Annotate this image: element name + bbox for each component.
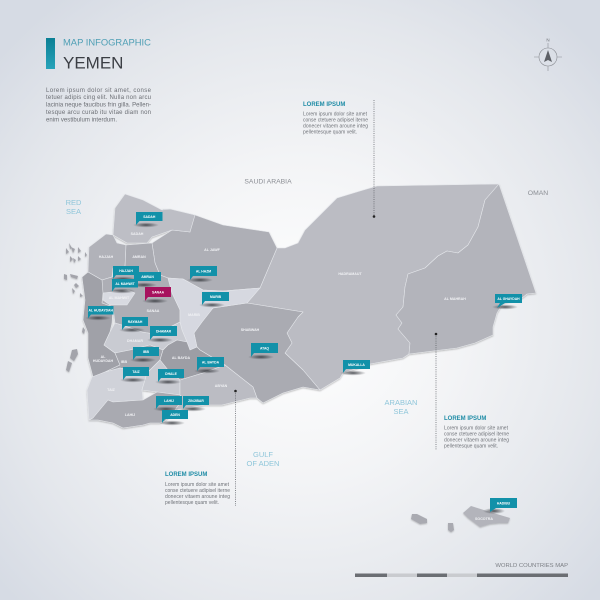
- region labels: SADAH: [131, 232, 144, 236]
- intro paragraph: enim vestibulum interdum.: [46, 118, 117, 124]
- tag: Mukalla: [340, 360, 370, 376]
- tag: Sadah: [133, 212, 162, 228]
- callout: top: conse ctetuere adipisel iterne: [303, 118, 368, 124]
- tag: Al Bayda: [194, 357, 224, 374]
- region labels: AL: [101, 355, 106, 359]
- callout: top: donecer vitaem aroune integ: [303, 124, 368, 130]
- callout: bottom: pellentesque quam velit.: [165, 500, 219, 506]
- tag: Hajjah: HAJJAH: [119, 269, 133, 273]
- tag: Aden: [159, 410, 188, 426]
- intro paragraph: tetuer adipis cing elit. Nulla non arcu: [46, 95, 151, 101]
- tag: Amran: [131, 272, 161, 288]
- callout: right: pellentesque quam velit.: [444, 444, 498, 450]
- callout: bottom: Lorem ipsum dolor site amet: [165, 482, 230, 488]
- region: Raymah and Dhamar: [104, 322, 187, 353]
- tag: Zinjibar: ZINJIBAR: [188, 399, 204, 403]
- region: Al Jawf: [152, 209, 277, 291]
- tag: Marib: MARIB: [210, 295, 222, 299]
- region labels: ABYAN: [215, 384, 228, 388]
- callout: bottom: [165, 472, 230, 506]
- region: Al Mahwit: [103, 290, 135, 305]
- tag: Dhale: DHALE: [165, 372, 178, 376]
- region labels: SHABWAH: [241, 328, 260, 332]
- region labels: IBB: [121, 360, 127, 364]
- tag: Al Mahwit: AL MAHWIT: [115, 282, 136, 286]
- region labels: TAIZ: [107, 388, 116, 392]
- region: Al Hudaydah: [82, 272, 120, 377]
- region labels: HUDAYDAH: [93, 359, 114, 363]
- tag: Hadibu: [483, 498, 517, 514]
- region labels: SANAA: [147, 309, 160, 313]
- tag: Taiz: TAIZ: [132, 370, 140, 374]
- neighbouring country and sea labels: OF ADEN: [247, 459, 279, 468]
- neighbouring country and sea labels: SAUDI ARABIA: [244, 178, 292, 186]
- callout: right: Lorem ipsum dolor site amet: [444, 426, 509, 432]
- tag: Dhamar: DHAMAR: [156, 330, 172, 334]
- callout: right: LOREM IPSUM: [444, 416, 486, 422]
- tag: Sadah: SADAH: [143, 215, 156, 219]
- tag: Al Bayda: AL BAYDA: [202, 360, 220, 364]
- compass: [534, 38, 562, 71]
- tag: Al Mahwit: [109, 279, 138, 294]
- region: Abyan: [175, 365, 257, 410]
- region: Shabwah: [194, 303, 320, 403]
- tag: Al Ghaydah: [492, 294, 522, 310]
- tag: Al Hudaydah: [85, 306, 114, 320]
- tag: Ataq: ATAQ: [260, 346, 269, 350]
- region labels: AMRAN: [132, 255, 146, 259]
- tag: Dhamar: [147, 326, 177, 342]
- tag: Sanaa (capital): [142, 287, 171, 304]
- region: Marib: [168, 278, 260, 350]
- region: Al Mahrah: [396, 184, 536, 354]
- intro paragraph: Lorem ipsum dolor sit amet, conse: [46, 88, 152, 94]
- tag: Lahij: [153, 396, 182, 412]
- callout: top: [303, 102, 368, 136]
- tag: Hadibu: HADIBU: [497, 502, 511, 506]
- region labels: AL BAYDA: [172, 356, 190, 360]
- tag: Aden: ADEN: [170, 413, 180, 417]
- tag: Ataq: [248, 343, 278, 360]
- tag: Taiz: [120, 367, 149, 382]
- islands: Red Sea: [64, 243, 87, 372]
- tag: Ibb: [130, 347, 159, 362]
- region: Sanaa: [102, 267, 180, 335]
- Socotra island: [463, 506, 510, 527]
- callout: top: Lorem ipsum dolor site amet: [303, 112, 368, 118]
- neighbouring country and sea labels: RED: [66, 198, 82, 207]
- callout: bottom: conse ctetuere adipisel iterne: [165, 488, 230, 494]
- intro paragraph: lacinia neque faucibus frin gilla. Pellen-: [46, 102, 151, 108]
- callout: top: LOREM IPSUM: [303, 102, 345, 108]
- tag: Dhale: [155, 369, 184, 384]
- callout: right: [444, 416, 509, 450]
- tag: Amran: AMRAN: [141, 275, 154, 279]
- tag: Sanaa (capital): SANAA: [152, 290, 165, 294]
- intro paragraph: tesque arcu curab itu vitae diam non: [46, 110, 151, 116]
- callout: bottom: LOREM IPSUM: [165, 472, 207, 478]
- tag: Lahij: LAHIJ: [164, 399, 174, 403]
- neighbouring country and sea labels: GULF: [253, 450, 273, 459]
- compass: N: [546, 38, 550, 42]
- region labels: MARIB: [188, 313, 200, 317]
- callout: bottom: donecer vitaem aroune integ: [165, 494, 230, 500]
- title block: YEMEN: [63, 53, 123, 72]
- tag: Al Hazm: AL HAZM: [196, 270, 211, 274]
- region: Hajjah: [88, 234, 126, 280]
- region labels: AL MAHWIT: [109, 296, 130, 300]
- map of Yemen: [64, 184, 536, 532]
- tag: Raymah: RAYMAH: [128, 320, 143, 324]
- region labels: AL MAHRAH: [444, 297, 466, 301]
- tag: Al Hudaydah: AL HUDAYDAH: [88, 308, 113, 312]
- tag: Al Hazm: [187, 266, 217, 282]
- dotted leader lines: [234, 100, 437, 506]
- region labels: HADRAMAUT: [338, 272, 362, 276]
- region: Taiz: [87, 368, 147, 420]
- region labels: HAJJAH: [99, 255, 114, 259]
- tag: Hajjah: [110, 266, 139, 282]
- region: Ibb: [105, 345, 163, 373]
- neighbouring country and sea labels: SEA: [393, 407, 409, 416]
- tag: Al Ghaydah: AL GHAYDAH: [497, 297, 520, 301]
- intro paragraph: [46, 88, 152, 124]
- neighbouring country and sea labels: [66, 178, 548, 468]
- tag: Zinjibar: [180, 396, 209, 412]
- callout: top: pellentesque quam velit.: [303, 130, 357, 136]
- callout: right: donecer vitaem aroune integ: [444, 438, 509, 444]
- region: Ad Dali: [142, 360, 180, 395]
- tag: Ibb: IBB: [143, 350, 149, 354]
- neighbouring country and sea labels: ARABIAN: [385, 398, 417, 407]
- footer scale bar: [355, 574, 568, 577]
- neighbouring country and sea labels: OMAN: [528, 190, 548, 197]
- region labels: LAHIJ: [125, 413, 135, 417]
- callout: right: conse ctetuere adipisel iterne: [444, 432, 509, 438]
- neighbouring country and sea labels: SEA: [66, 207, 81, 216]
- title block: MAP INFOGRAPHIC: [63, 37, 151, 48]
- footer caption: WORLD COUNTRIES MAP: [495, 563, 568, 569]
- region: Lahij: [89, 392, 182, 428]
- region labels: AL JAWF: [204, 248, 221, 252]
- islands: Abd al Kuri: [411, 514, 454, 532]
- tag: Raymah: [119, 317, 148, 332]
- title block: [46, 37, 151, 72]
- region: Amran: [125, 243, 160, 275]
- region: Saada: [113, 194, 195, 243]
- region labels: [93, 232, 493, 521]
- tag: Marib: [199, 292, 229, 308]
- region: Al Bayda: [160, 340, 225, 380]
- region labels: DHAMAR: [127, 339, 143, 343]
- tag: Mukalla: MUKALLA: [348, 363, 365, 367]
- region: Hadramaut: [247, 184, 499, 390]
- region labels: SOCOTRA: [475, 517, 493, 521]
